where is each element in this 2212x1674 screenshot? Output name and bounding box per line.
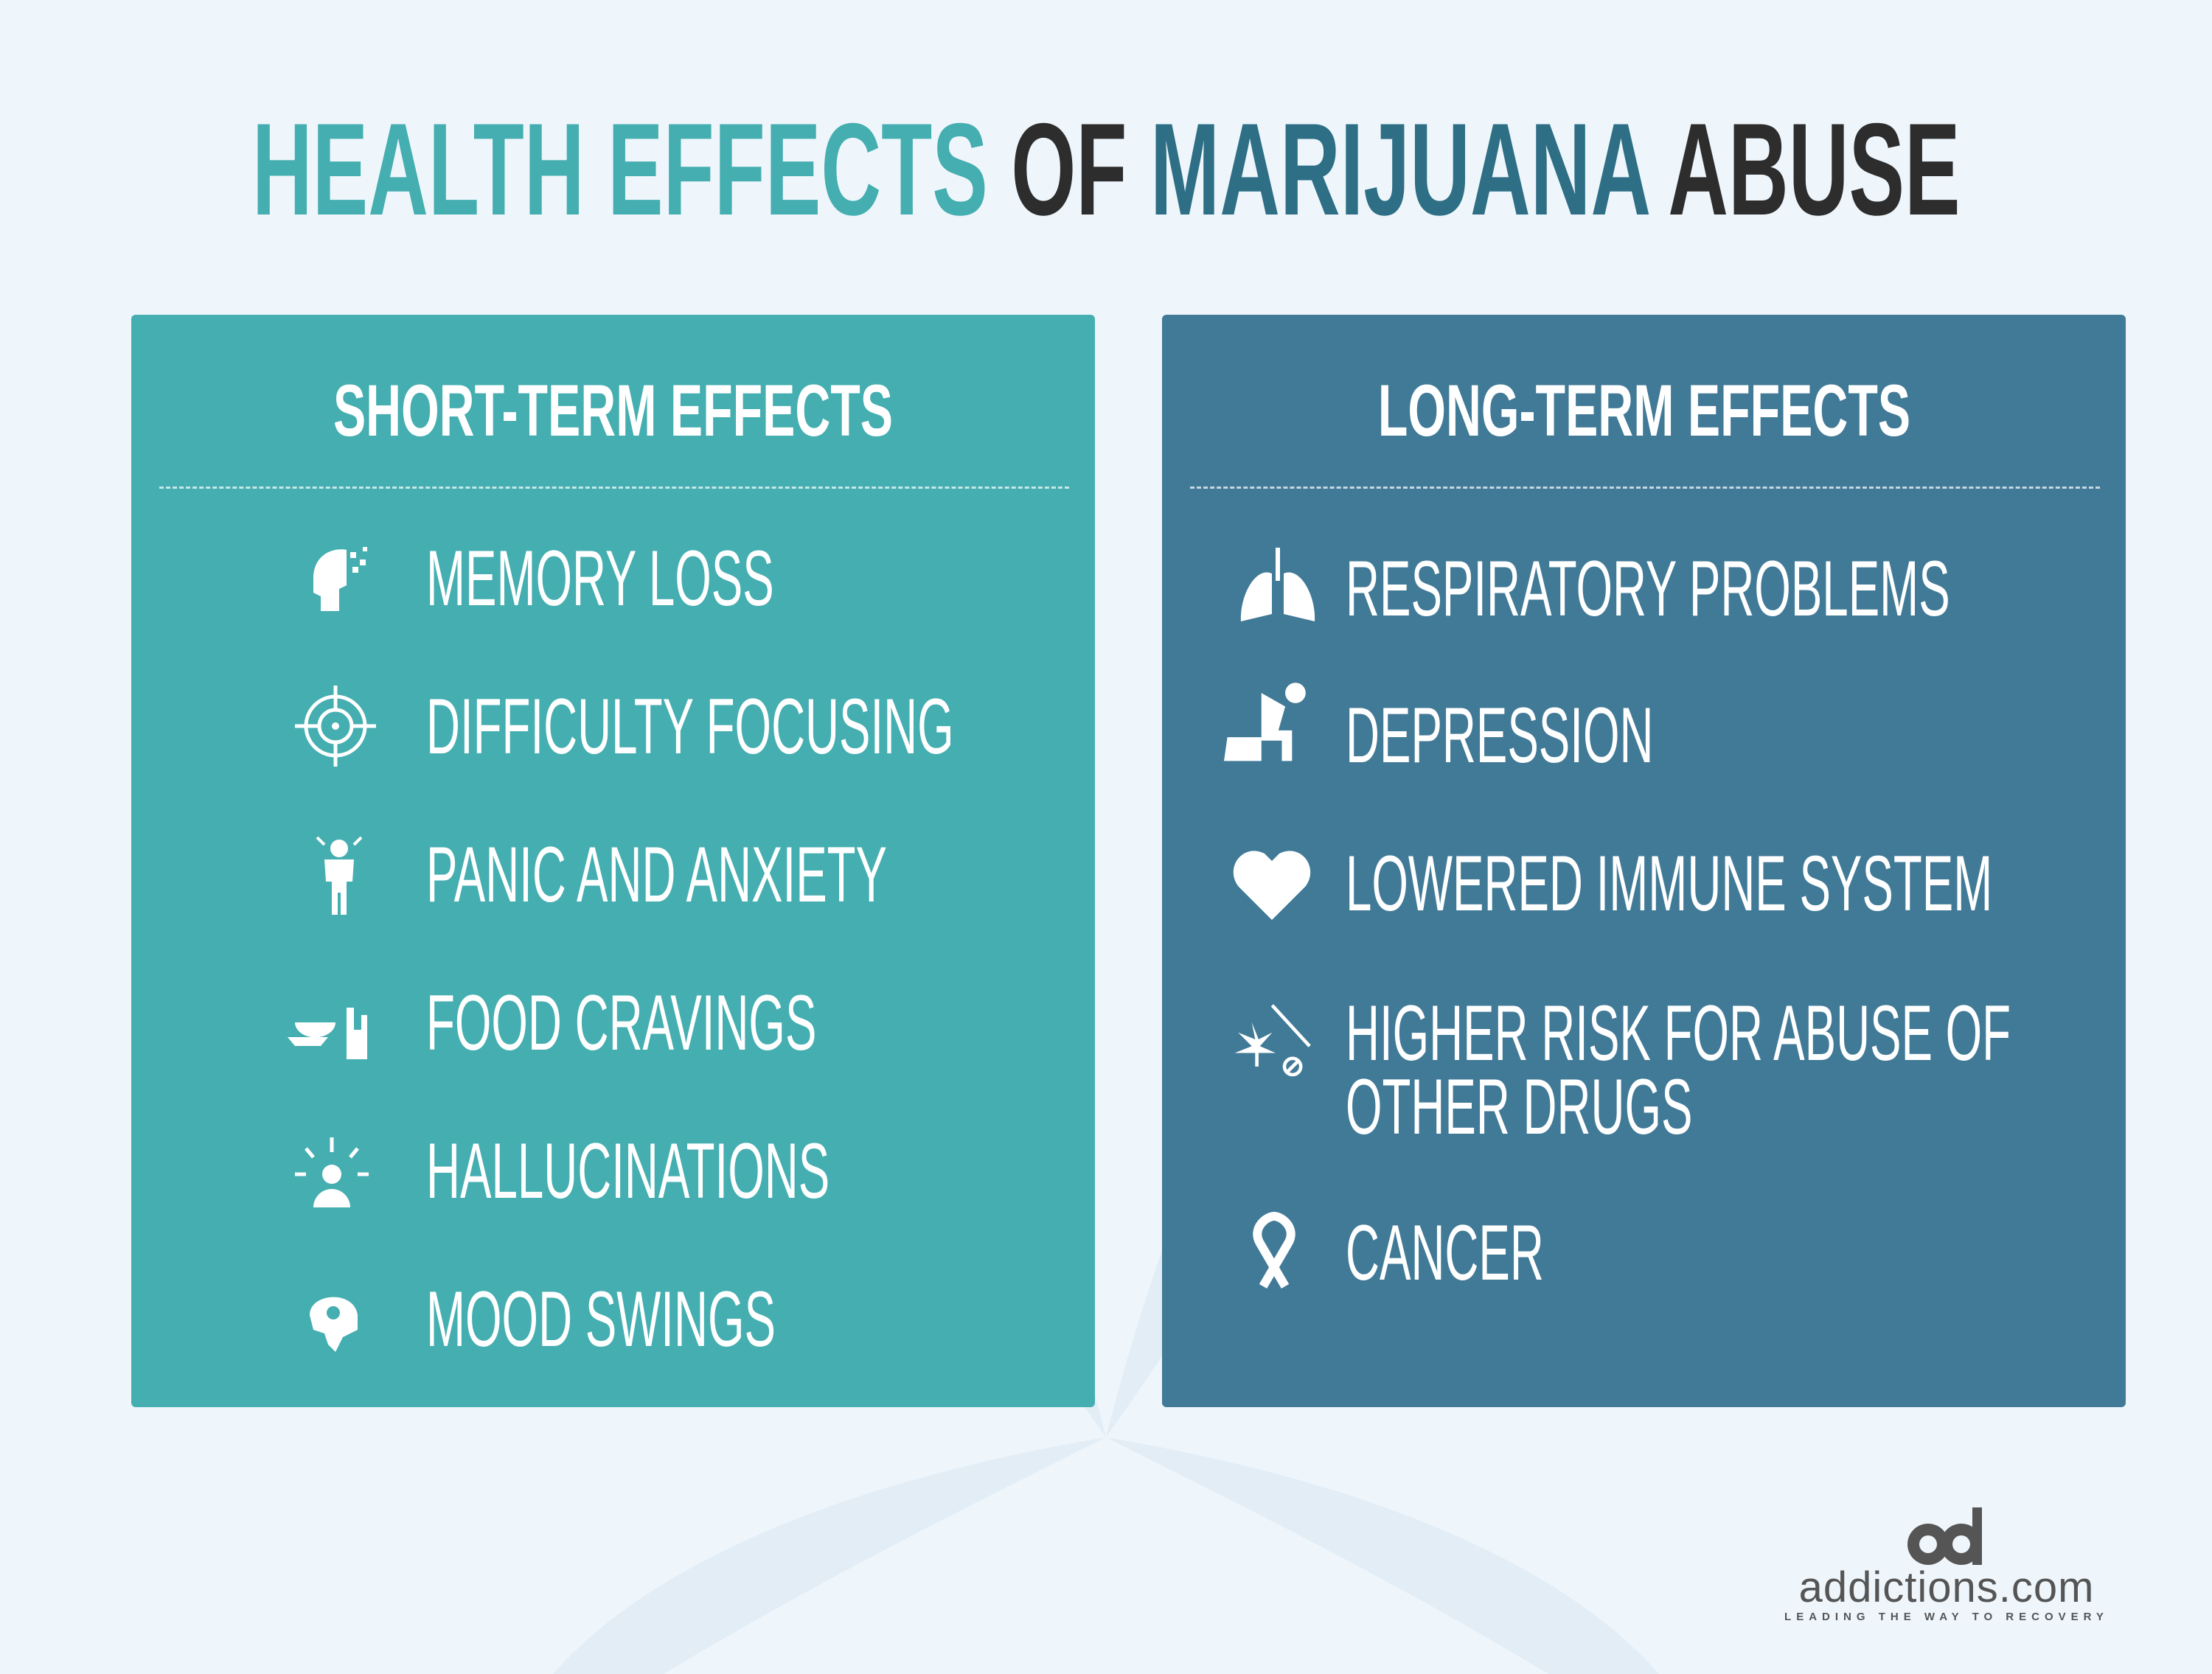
- panel: long-term: [1162, 315, 2126, 1407]
- icon: heart: [1233, 851, 1311, 920]
- text: depression: DEPRESSION: [1346, 691, 1653, 779]
- icon: ribbon: [1253, 1212, 1295, 1288]
- icon: mood head: [310, 1297, 358, 1352]
- title: HEALTH EFFECTS OF MARIJUANA ABUSE: [252, 96, 1960, 243]
- icon: head memory: [313, 547, 367, 611]
- icon: drugs: [1234, 1004, 1311, 1076]
- text: food cravings: FOOD CRAVINGS: [426, 978, 816, 1067]
- text: addictions.com: addictions.com: [1799, 1563, 2094, 1611]
- text: tagline: LEADING THE WAY TO RECOVERY: [1784, 1611, 2109, 1623]
- text: cancer: CANCER: [1346, 1208, 1544, 1297]
- icon: panic figure: [316, 836, 363, 915]
- icon: ad logo: [1907, 1507, 1982, 1565]
- text: higher risk: [1346, 988, 2011, 1151]
- icon: depression: [1224, 683, 1306, 761]
- heading: short-term: SHORT-TERM EFFECTS: [333, 369, 893, 451]
- icon: target: [295, 686, 376, 767]
- text: lowered immune system: LOWERED IMMUNE SYSTEM: [1346, 839, 1992, 927]
- icon: lungs: [1240, 548, 1315, 621]
- icon: hallucinations: [295, 1137, 369, 1207]
- logo: [1784, 1507, 2109, 1623]
- text: higher risk: HIGHER RISK FOR ABUSE OF: [1346, 988, 2011, 1077]
- panel: short-term: [131, 315, 1095, 1407]
- text: memory loss: MEMORY LOSS: [426, 534, 774, 622]
- text: panic and anxiety: PANIC AND ANXIETY: [426, 830, 887, 918]
- heading: long-term: LONG-TERM EFFECTS: [1377, 369, 1910, 451]
- text: higher risk: OTHER DRUGS: [1346, 1062, 1692, 1151]
- text: respiratory problems: RESPIRATORY PROBLEMS: [1346, 544, 1950, 632]
- text: difficulty focusing: DIFFICULTY FOCUSING: [426, 682, 954, 770]
- icon: food cravings: [288, 1008, 367, 1059]
- text: mood swings: MOOD SWINGS: [426, 1274, 776, 1363]
- text: hallucinations: HALLUCINATIONS: [426, 1126, 830, 1215]
